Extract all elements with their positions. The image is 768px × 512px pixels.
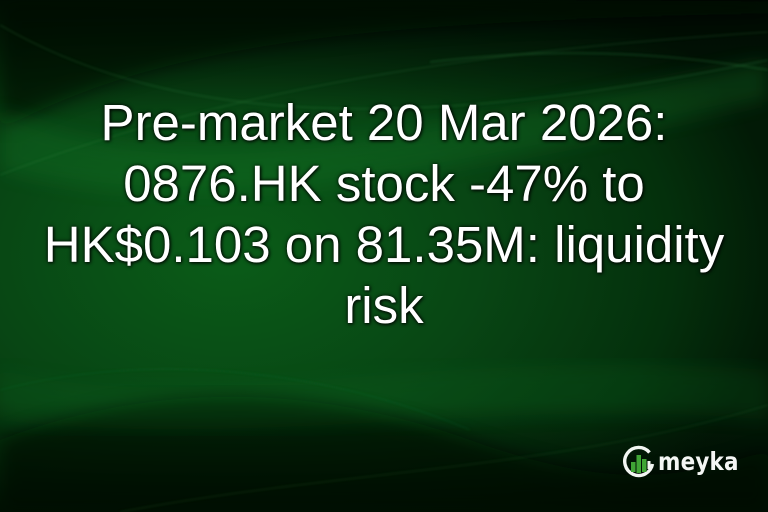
title: risk <box>344 277 424 334</box>
title <box>44 94 726 334</box>
title: 0876.HK stock -47% to <box>123 155 645 212</box>
title: Pre-market 20 Mar 2026: <box>101 94 667 151</box>
title: HK$0.103 on 81.35M: liquidity <box>44 216 724 273</box>
logo: meyka <box>623 446 739 478</box>
wordmark: meyka <box>658 447 739 476</box>
icon: ring with bars <box>623 446 654 478</box>
